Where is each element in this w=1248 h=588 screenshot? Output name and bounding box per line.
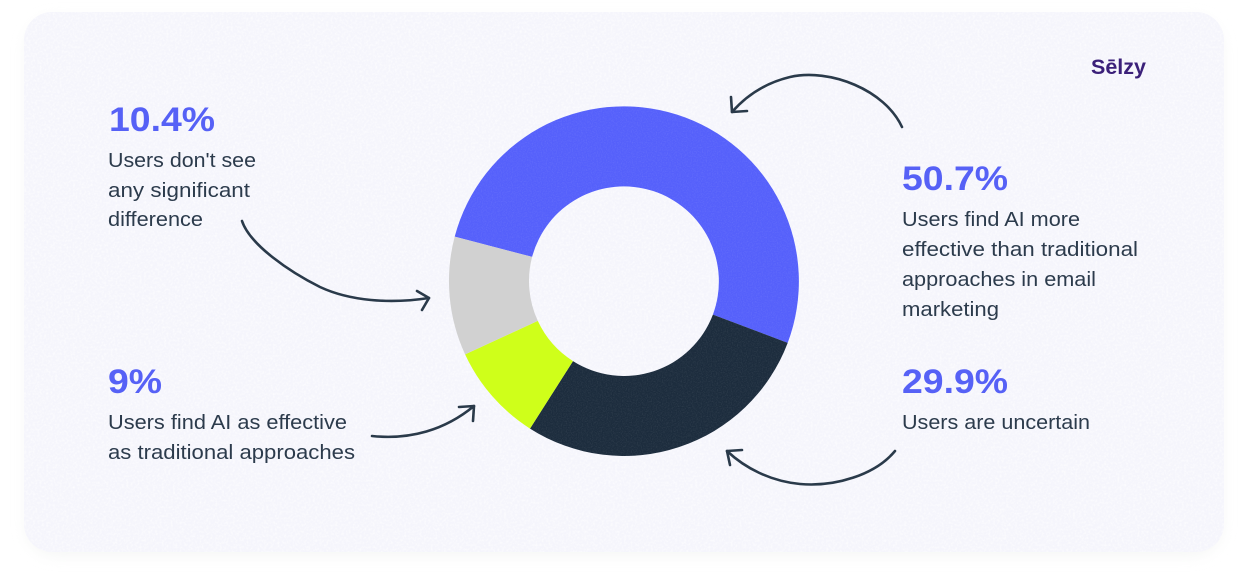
callout: 9%: 9% [108, 363, 162, 401]
callout: 9%: as traditional approaches [108, 442, 355, 464]
callout: 50.7% [902, 160, 1138, 321]
callout: 29.9%: Users are uncertain [902, 412, 1090, 434]
callout: 50.7%: marketing [902, 299, 999, 321]
segment: 10.4% grey [449, 237, 538, 354]
callout: 10.4%: any significant [108, 180, 250, 202]
arrow: left to grey segment [242, 221, 429, 310]
callout: 10.4%: 10.4% [109, 101, 215, 139]
arrow: top right to blue segment [731, 75, 902, 127]
arrow: left to lime segment [372, 406, 474, 437]
callout: 10.4%: difference [108, 209, 203, 231]
callout: 29.9% [902, 363, 1090, 434]
callout: 50.7%: effective than traditional [902, 239, 1138, 261]
callout: 10.4%: Users don't see [108, 150, 256, 172]
callout: 50.7%: Users find AI more [902, 209, 1080, 231]
callout: 50.7%: approaches in email [902, 269, 1096, 291]
segment: 9% lime [465, 321, 573, 429]
callout: 29.9%: 29.9% [902, 363, 1008, 401]
donut chart [449, 106, 799, 456]
segment: 29.9% dark [530, 315, 788, 456]
callout: 9% [108, 363, 355, 464]
donut grain texture [455, 106, 799, 456]
callout: 9%: Users find AI as effective [108, 412, 347, 434]
segment: 50.7% blue [455, 106, 799, 343]
arrow: bottom right to dark segment [727, 450, 895, 484]
callout: 50.7%: 50.7% [902, 160, 1008, 198]
callout: 10.4% [108, 101, 256, 231]
logo: Selzy: Sēlzy [1091, 56, 1146, 79]
